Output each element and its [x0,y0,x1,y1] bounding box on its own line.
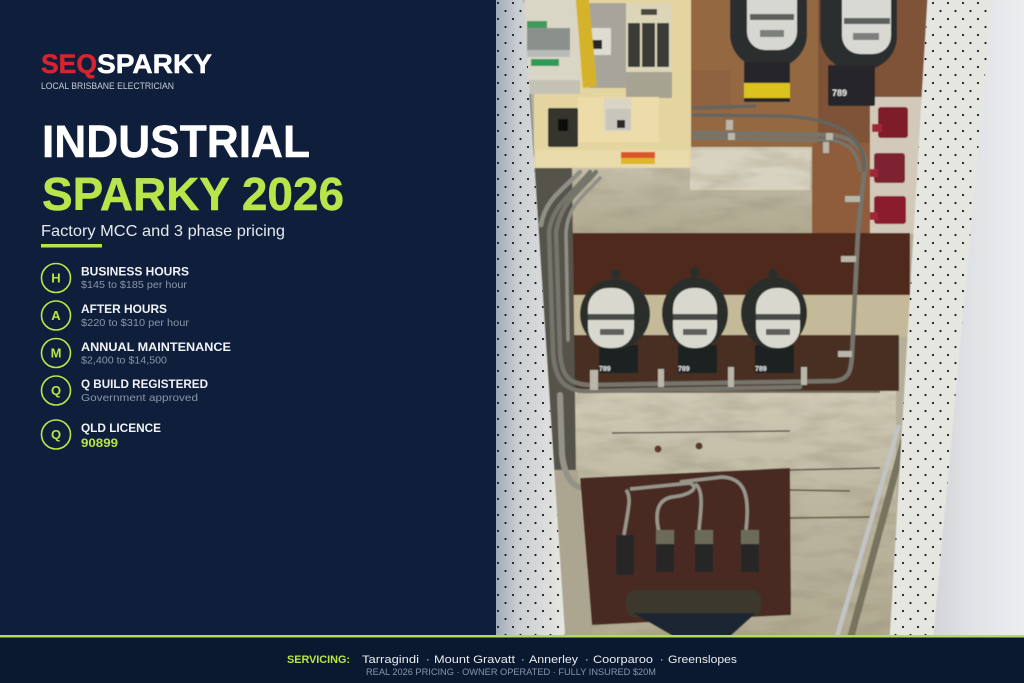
item: qld licence: 90899 [81,436,118,450]
recess behind board [530,93,914,530]
brown timber band lower [573,335,899,391]
panel: left navy background [0,0,496,636]
plywood lower right [812,143,870,233]
right enclosure with black slots [626,3,672,98]
subtitle: Factory MCC and 3 phase pricing [41,223,285,240]
item: business hours [42,264,189,292]
footer accent line [0,635,1024,638]
meter 2: 789 [678,366,690,373]
footer servicing label: SERVICING: [287,654,350,666]
grey enclosure with breakers [524,0,580,94]
grey enclosure centre [589,3,626,88]
item: qld licence: QLD LICENCE [81,421,161,435]
item: business hours: $145 to $185 per hour [81,279,188,291]
footer suburbs: Greenslopes [668,654,738,666]
title [42,116,344,220]
perforated panel right [889,0,965,635]
footer suburbs: Mount Gravatt [434,654,515,666]
electricity meter top right [820,0,897,106]
logo tagline: LOCAL BRISBANE ELECTRICIAN [41,81,174,92]
item: after hours: A [51,308,61,323]
title line one: INDUSTRIAL [42,116,310,167]
footer suburbs: · [521,654,525,666]
lower switch and breaker panel [548,97,659,147]
photo: electrical switchboard [486,0,1024,651]
footer suburbs [362,654,738,666]
item: qld licence: Q [51,427,61,442]
meter 2 [662,267,728,373]
footer suburbs: Tarragindi [362,654,419,666]
subtitle underline [41,244,102,248]
item: q build registered: Q BUILD REGISTERED [81,377,208,391]
electricity meter top right: 789 [832,88,847,98]
brown timber band [570,233,910,295]
logo [41,49,212,92]
perforation dots left [496,2,565,635]
item: after hours [42,301,190,330]
wall at right [925,0,1024,650]
conduit clips [590,120,860,390]
fuse backing board [870,97,924,234]
item: business hours: BUSINESS HOURS [81,264,189,278]
yellow warning tape [575,0,597,88]
meter 3: 789 [755,366,767,373]
item: annual maintenance: ANNUAL MAINTENANCE [81,340,231,354]
logo wordmark red part: SEQ [41,49,97,79]
item: after hours: AFTER HOURS [81,302,167,316]
meter 3 [741,269,807,373]
perforated panel left [496,0,566,635]
electricity meter top left [730,0,807,102]
footer suburbs: Coorparoo [593,654,653,666]
item: q build registered: Government approved [81,392,198,404]
grey conduit runs [541,106,865,490]
item: annual maintenance: $2,400 to $14,500 [81,354,167,366]
perforation dots right [894,2,987,635]
concrete patch upper [570,147,813,234]
item: business hours: H [51,270,61,286]
left dark strip beside timber [530,168,576,470]
item: after hours: $220 to $310 per hour [81,317,190,329]
red fuses [870,107,908,224]
plywood upper section [691,0,931,148]
plywood backing of fuse box area [534,0,691,168]
footer bar [0,635,1024,683]
rust board with connectors [580,468,791,640]
logo wordmark white part: SPARKY [97,49,212,79]
footer suburbs: Annerley [529,654,579,666]
footer suburbs: · [585,654,589,666]
footer suburbs: · [426,654,430,666]
concrete wall lower [574,391,896,651]
title line two: SPARKY 2026 [42,168,344,220]
meter 1 [580,269,650,373]
item: qld licence [42,420,161,450]
item: q build registered: Q [51,383,61,398]
meter 1: 789 [599,366,611,373]
footer suburbs: · [660,654,664,666]
diagonal grey conduit [836,425,904,640]
footer tagline: REAL 2026 PRICING · OWNER OPERATED · FULLY INSURED $20M [366,667,656,677]
red and yellow warning label [621,152,655,164]
item: annual maintenance [42,338,231,368]
three dial meters [580,267,807,373]
cream timber band [571,295,910,337]
list: pricing and credentials [42,264,231,450]
item: annual maintenance: M [51,346,61,360]
item: q build registered [42,376,208,405]
